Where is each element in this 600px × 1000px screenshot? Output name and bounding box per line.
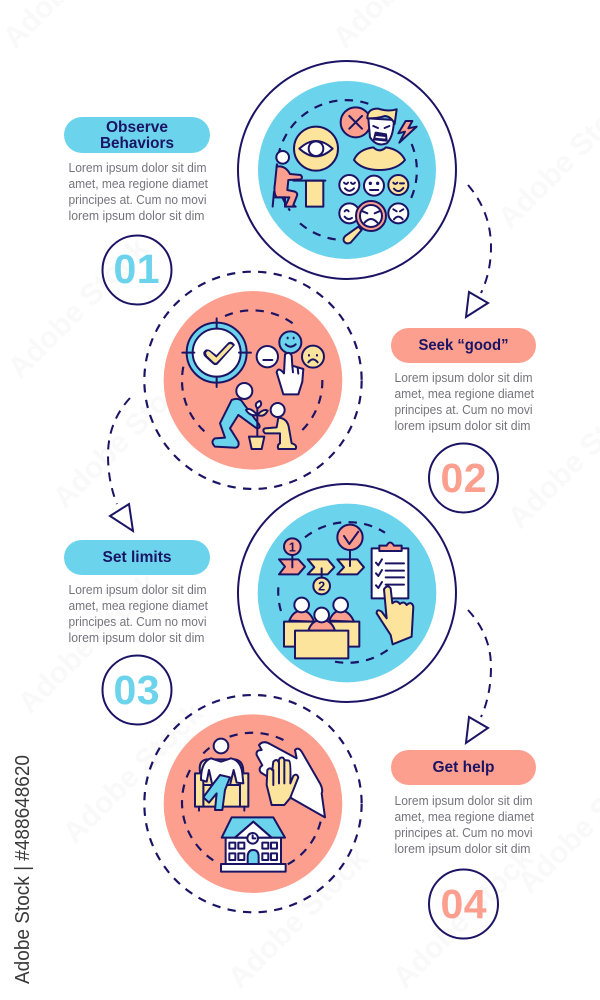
watermark: Adobe Stock [12,567,165,720]
text block: step 1: lorem ipsum dolor sit dim [68,208,204,223]
icon: numbered process steps: 1 [289,540,296,554]
number badge: 03: 03 [114,667,160,713]
text block: step 4: lorem ipsum dolor sit dim [394,841,530,856]
icon: person at desk [273,151,325,207]
icon: target with check [182,318,251,387]
number badge: 01 [102,236,172,304]
panel: step 4 illustration [144,695,362,912]
icon: numbered process steps: 2 [318,580,325,594]
number badge: 04: 04 [440,881,487,927]
heading: Seek good [391,328,536,363]
number badge: 03 [102,656,172,724]
heading: Get help [391,750,536,785]
watermark: Adobe Stock [222,842,375,995]
icon: school building [221,817,286,872]
number badge: 02: 02 [440,455,486,501]
icon: adult and child planting [212,383,296,449]
text block: step 1: amet, mea regione diamet [68,176,208,191]
heading: Observe Behaviors: Behaviors [100,135,174,152]
connector arrow: step 1 to 2 [466,185,491,317]
heading: Observe Behaviors [64,117,210,153]
text block: step 3 [68,582,208,645]
icon: choosing faces [257,331,324,394]
text block: step 1 [68,160,208,223]
icon: person in armchair [195,739,248,811]
text block: step 4: amet, mea regione diamet [394,809,534,824]
text block: step 2: principes at. Cum no movi [394,402,533,417]
text block: step 4: Lorem ipsum dolor sit dim [394,793,532,808]
heading: Observe Behaviors: Observe [106,119,168,136]
icon: magnifier [344,201,386,243]
watermark: Adobe Stock [2,232,155,385]
icon: checklist with hand [372,542,413,644]
number badge: 02 [429,444,498,512]
number badge: 01: 01 [114,246,160,292]
icon: supporting hands [257,742,325,817]
heading: Seek good: Seek “good” [418,337,508,354]
icon: numbered process steps [279,525,364,594]
watermark: Adobe Stock [387,842,540,995]
connector arrow: step 2 to 3 [108,398,133,531]
text block: step 4: principes at. Cum no movi [394,825,533,840]
text block: step 2: lorem ipsum dolor sit dim [394,418,530,433]
icon: angry man [354,109,405,170]
watermark: Adobe Stock [47,362,200,515]
icon: people at table [284,598,359,658]
stock id side label: Adobe Stock | #488648620 [12,755,34,984]
text block: step 2: Lorem ipsum dolor sit dim [394,370,532,385]
heading: Get help: Get help [432,759,495,776]
text block: step 3: lorem ipsum dolor sit dim [68,630,204,645]
panel: step 3 illustration [238,484,456,702]
heading: Set limits: Set limits [102,549,172,566]
text block: step 3: Lorem ipsum dolor sit dim [68,582,206,597]
text block: step 4 [394,793,534,856]
heading: Set limits [64,540,210,575]
number badge: 04 [429,870,498,938]
icon: cross circle [341,107,371,137]
text block: step 2: amet, mea regione diamet [394,386,534,401]
icon: eye [294,127,338,171]
text block: step 3: amet, mea regione diamet [68,598,208,613]
text block: step 2 [394,370,534,433]
watermark: Adobe Stock [57,697,210,850]
connector arrow: step 3 to 4 [466,610,491,743]
panel: step 1 illustration [238,61,456,279]
icon: lightning [398,121,417,143]
panel: step 2 illustration [144,272,362,489]
text block: step 3: principes at. Cum no movi [68,614,207,629]
text block: step 1: Lorem ipsum dolor sit dim [68,160,206,175]
text block: step 1: principes at. Cum no movi [68,192,207,207]
icon: emotion faces [339,175,408,223]
